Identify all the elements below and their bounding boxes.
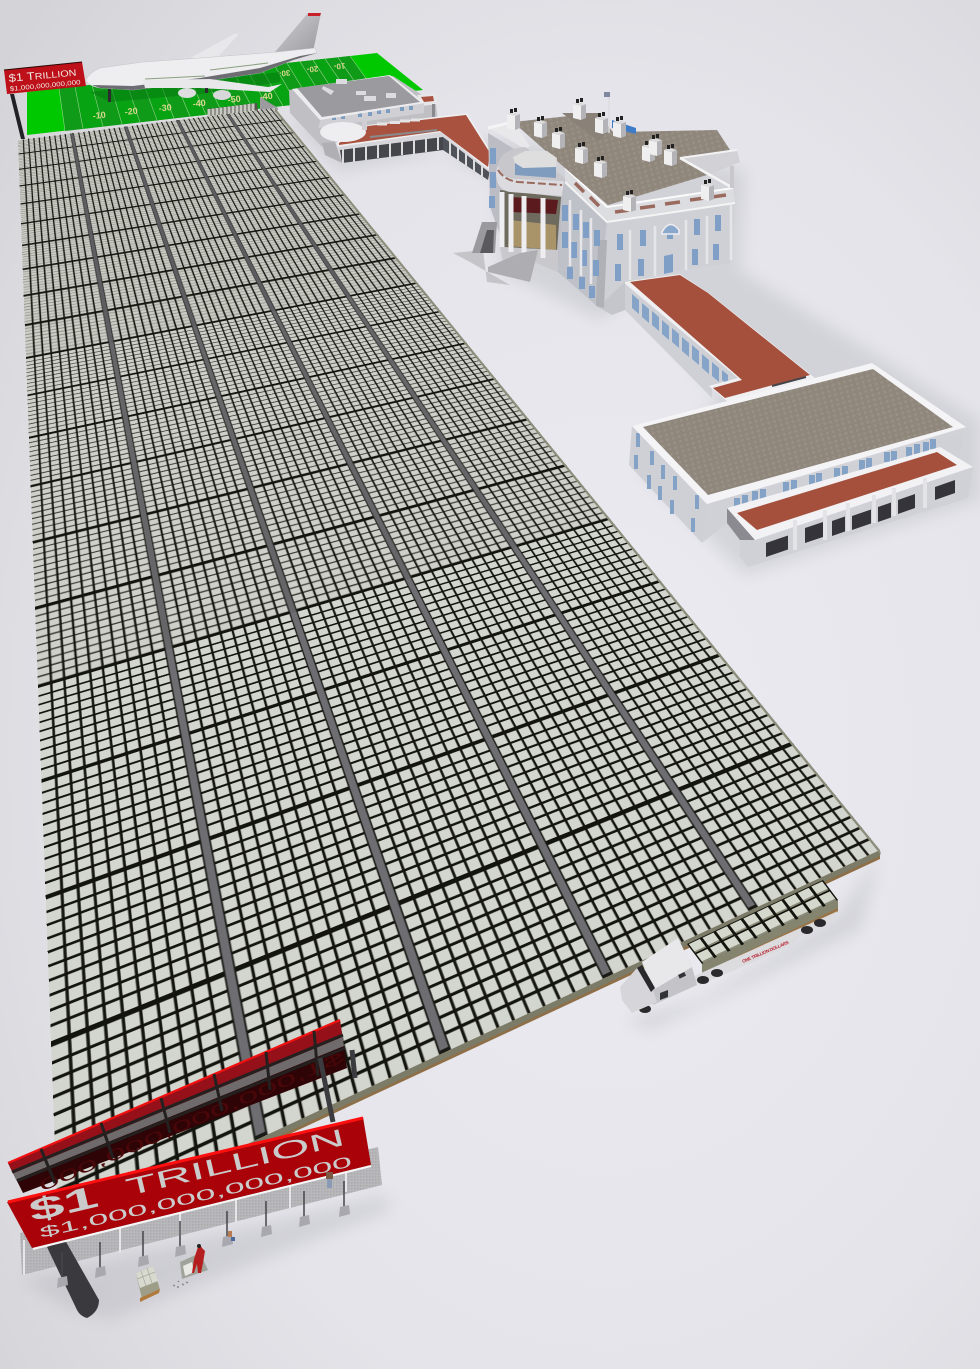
pallet row beyond the field edge <box>207 97 278 118</box>
yard numbers <box>92 61 346 121</box>
building: White House <box>453 92 740 315</box>
yard numbers: -10 <box>92 110 106 121</box>
truck: ONE TRILLION DOLLARS <box>741 940 789 964</box>
pole of the front billboard <box>47 1240 99 1318</box>
back billboard <box>8 1020 355 1195</box>
back billboard: $1,000,000,000,000 <box>37 1049 347 1195</box>
truck <box>620 911 838 1013</box>
front billboard: TRILLION <box>123 1124 347 1202</box>
yard numbers: -30 <box>158 102 172 113</box>
chimneys <box>507 98 714 212</box>
small billboard, top left: $1 T RILLION <box>8 67 77 85</box>
single cash pallet <box>136 1266 160 1302</box>
airplane <box>86 13 321 102</box>
flag <box>604 92 610 133</box>
yard numbers: -20 <box>124 106 138 117</box>
yard numbers: 30- <box>278 68 291 78</box>
far rows of blocks <box>18 108 418 358</box>
yard numbers: -40 <box>192 98 206 109</box>
south portico <box>472 147 565 282</box>
front billboard: $1 <box>26 1179 102 1229</box>
fence signs <box>57 1181 350 1288</box>
yard numbers: 10- <box>333 61 346 71</box>
truck cargo: last pallets on trailer <box>687 880 838 978</box>
pile of cash and person in red <box>173 1244 208 1287</box>
building: large west office block <box>629 363 973 567</box>
person at the fence <box>326 1172 333 1188</box>
building: West Wing colonnade with red roof <box>623 274 815 402</box>
yard numbers: -50 <box>227 94 241 105</box>
yard numbers: 20- <box>306 64 319 74</box>
building: east wing <box>289 75 492 180</box>
middle rows of blocks <box>26 284 610 688</box>
person near the sign <box>228 1231 235 1241</box>
front billboard <box>7 1117 371 1249</box>
small billboard, top left <box>4 62 86 94</box>
grid outer edge: pallet sides <box>58 108 881 1242</box>
near rows of blocks <box>38 520 880 1189</box>
yard numbers: -40 <box>259 91 273 102</box>
small billboard, top left: $1,000,000,000,000 <box>10 79 81 93</box>
football field <box>27 53 423 135</box>
fence <box>20 1147 382 1275</box>
small billboard pole <box>10 94 25 139</box>
front billboard: $1,000,000,000,000 <box>38 1153 354 1242</box>
